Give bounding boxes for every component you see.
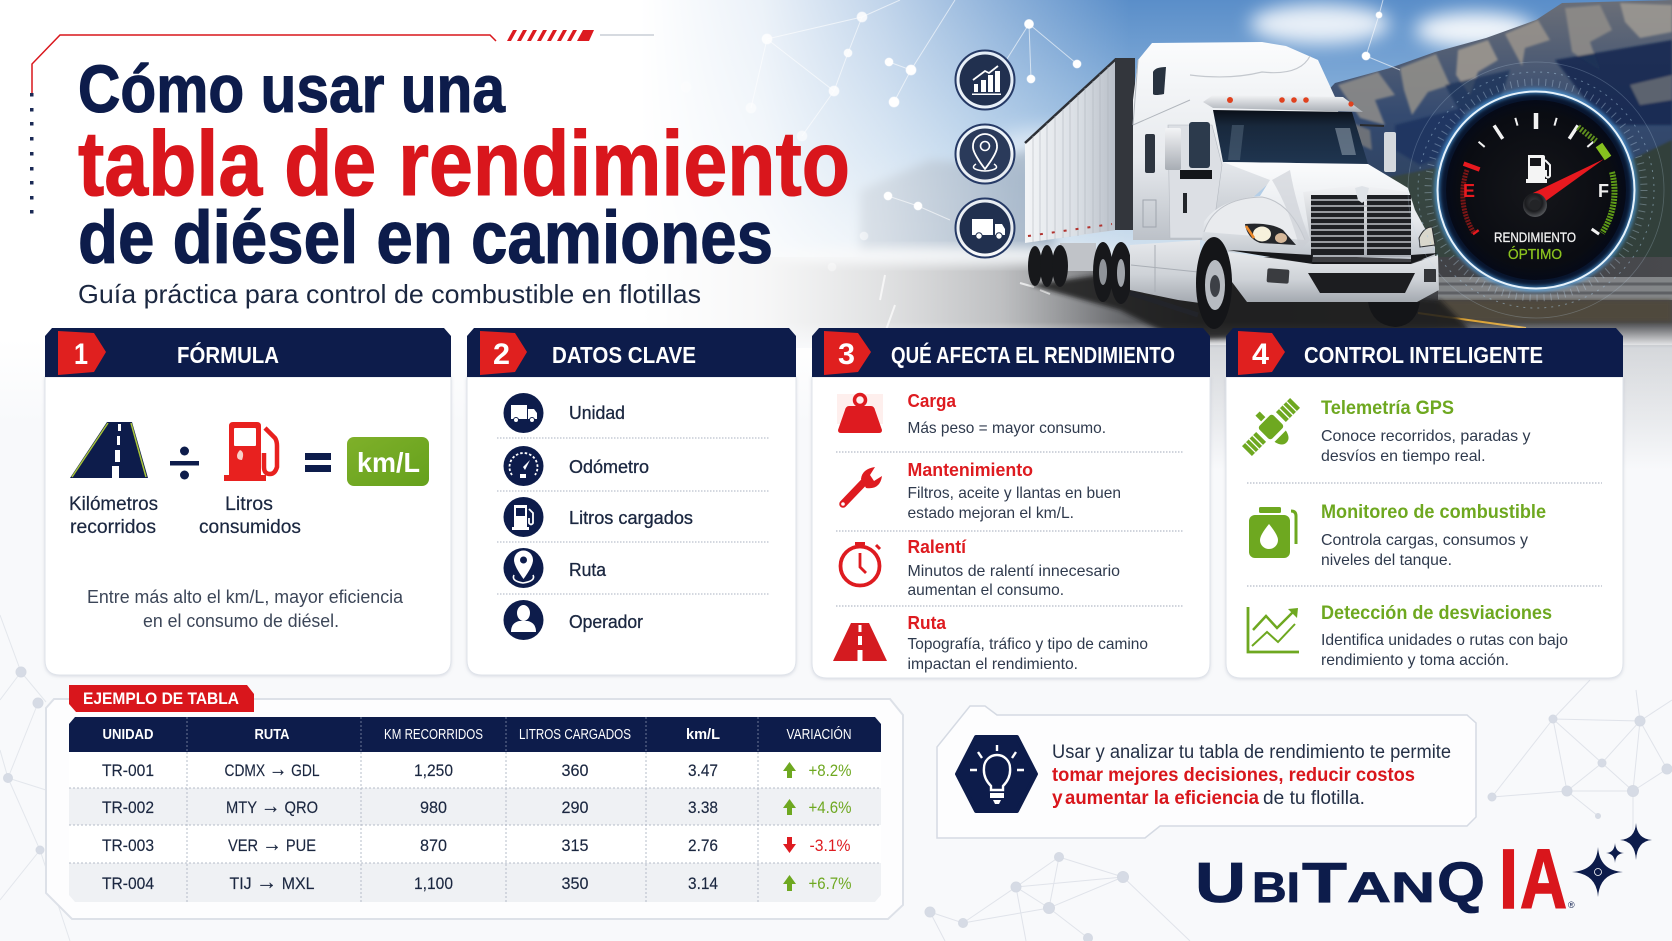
table row TR-004 (102, 869, 852, 894)
table header: VARIACIÓN (786, 726, 852, 743)
item: monitoreo de combustible: niveles del tanque. (1321, 552, 1452, 569)
panel 4 header: 4 (1252, 338, 1269, 371)
table row TR-003: 2.76 (688, 837, 718, 855)
fuel tank and steps (1130, 240, 1200, 315)
table row TR-004: 3.14 (688, 875, 718, 893)
cab sleeper and fairing (1133, 42, 1340, 240)
table header: UNIDAD (102, 726, 154, 743)
panel 4 card (1226, 377, 1623, 678)
table row TR-001: 3.47 (688, 762, 718, 780)
truck (1025, 42, 1470, 340)
logo wordmark: Q (1437, 851, 1485, 915)
rear wheels (1028, 242, 1132, 304)
sparkles (1572, 823, 1652, 897)
panel 2 header: DATOS CLAVE (552, 342, 696, 368)
table header: RUTA (254, 726, 290, 743)
formula labels (69, 494, 301, 538)
gauge E and F labels: E (1463, 181, 1475, 201)
equals symbol (305, 453, 331, 472)
item: ruta: Topografía, tráfico y tipo de camino (908, 636, 1148, 653)
logo IA: I (1499, 832, 1518, 926)
gauge E and F labels (1463, 181, 1609, 201)
row dividers (497, 438, 769, 594)
item: ruta: Ruta (908, 613, 947, 633)
item: ruta: impactan el rendimiento. (908, 656, 1078, 673)
logo wordmark: T (1302, 851, 1347, 915)
callout text: aumentar la eficiencia (1065, 788, 1259, 809)
table row TR-004: TR-004 (102, 875, 154, 893)
km/L badge: km/L (357, 447, 420, 478)
item: detección de desviaciones: Detección de desviaciones (1321, 603, 1552, 624)
table row TR-003: -3.1% (810, 837, 851, 855)
trailer (1025, 58, 1135, 271)
panel 3 card (812, 377, 1210, 678)
front wheels (1196, 237, 1420, 329)
item: detección de desviaciones: rendimiento y toma acción. (1321, 652, 1509, 669)
grille (1303, 185, 1411, 257)
cab door, window and mirror (1168, 125, 1222, 238)
table row TR-003: 315 (562, 837, 588, 855)
icon: light bulb hexagon (957, 737, 1036, 811)
table row TR-001 (102, 756, 852, 781)
table row TR-002: +4.6% (808, 799, 852, 817)
table rows (69, 752, 881, 902)
logo wordmark: U (1195, 851, 1246, 915)
gauge text: RENDIMIENTO (1494, 230, 1576, 245)
data table (69, 717, 881, 902)
table frame (46, 699, 903, 919)
formula labels: recorridos (70, 517, 156, 538)
item: ralentí (840, 537, 1120, 599)
item: monitoreo de combustible: Controla cargas, consumos y (1321, 532, 1528, 549)
logo wordmark: BI (1252, 864, 1300, 912)
tab label (69, 685, 254, 712)
title: Cómo usar una (78, 52, 506, 127)
item: odómetro: Odómetro (569, 457, 649, 477)
item: ruta: Ruta (569, 560, 607, 580)
panel 4 header (1226, 328, 1623, 377)
item: telemetría gps: Conoce recorridos, paradas y (1321, 428, 1530, 445)
formula labels: consumidos (199, 517, 301, 538)
table row TR-003: 870 (420, 837, 447, 855)
table row TR-001: 360 (562, 762, 588, 780)
panel 1: fórmula (45, 328, 451, 675)
callout text: y (1052, 788, 1063, 809)
item: detección de desviaciones (1248, 603, 1568, 669)
callout frame (937, 706, 1476, 838)
gauge needle (1523, 159, 1604, 217)
item: telemetría gps: desvíos en tiempo real. (1321, 448, 1486, 465)
formula note (87, 587, 404, 631)
item: carga: Más peso = mayor consumo. (908, 420, 1106, 437)
item: telemetría gps: Telemetría GPS (1321, 398, 1454, 419)
table row TR-002: MTY → QRO (226, 793, 318, 818)
icon: road (70, 422, 148, 478)
table row TR-003: VER → PUE (228, 831, 316, 856)
table row TR-002: 980 (420, 799, 447, 817)
headlights (1245, 224, 1435, 247)
panel 1 card (45, 377, 451, 675)
panel 1 header: FÓRMULA (177, 341, 279, 368)
table row TR-002: 3.38 (688, 799, 718, 817)
km/L badge (347, 437, 429, 486)
bumper (1228, 250, 1439, 302)
callout text: de tu flotilla. (1263, 788, 1365, 809)
item: carga (837, 391, 1106, 437)
table row TR-002 (102, 793, 852, 818)
item: mantenimiento: Filtros, aceite y llantas en buen (908, 485, 1121, 502)
item: ruta (833, 613, 1148, 673)
subtitle: Guía práctica para control de combustible en flotillas (78, 279, 701, 309)
gauge scale ticks (1464, 113, 1599, 234)
panel 3: qué afecta el rendimiento (812, 328, 1210, 678)
logo IA: A (1520, 832, 1567, 926)
table row TR-004: TIJ → MXL (230, 869, 314, 894)
callout text: tomar mejores decisiones, reducir costos (1052, 765, 1415, 786)
hood (1202, 162, 1435, 260)
formula labels: Kilómetros (69, 494, 158, 515)
table row TR-004: 1,100 (414, 875, 453, 893)
registered mark: ® (1568, 900, 1575, 910)
item: ruta (504, 548, 607, 588)
divide symbol (170, 446, 199, 480)
table header: km/L (686, 726, 720, 743)
gauge text (1494, 230, 1576, 263)
formula note: Entre más alto el km/L, mayor eficiencia (87, 587, 404, 607)
item: mantenimiento (841, 460, 1121, 522)
icon: fuel pump (224, 422, 277, 481)
table header: KM RECORRIDOS (384, 726, 483, 743)
photo background: sky, mountains and road (640, 0, 1672, 470)
item: mantenimiento: estado mejoran el km/L. (908, 505, 1074, 522)
formula labels: Litros (225, 494, 273, 515)
item: unidad: Unidad (569, 403, 625, 423)
item: litros cargados: Litros cargados (569, 508, 693, 528)
formula note: en el consumo de diésel. (143, 611, 339, 631)
table row TR-001: +8.2% (808, 762, 852, 780)
panel 4: control inteligente (1226, 328, 1623, 678)
icon: delivery truck (956, 198, 1014, 258)
item: ralentí: aumentan el consumo. (908, 582, 1064, 599)
windshield (1213, 110, 1368, 164)
item: telemetría gps (1234, 390, 1530, 467)
item: litros cargados (504, 497, 693, 537)
panel 1 header: 1 (74, 338, 88, 371)
item: monitoreo de combustible (1249, 502, 1546, 569)
table row TR-004: 350 (562, 875, 588, 893)
table header: LITROS CARGADOS (519, 726, 631, 743)
row dividers (1247, 483, 1602, 586)
title: de diésel en camiones (78, 196, 773, 279)
background network bottom (0, 615, 1672, 941)
item: carga: Carga (908, 391, 957, 411)
panel 2 header (467, 328, 796, 377)
table row TR-004: +6.7% (808, 875, 852, 893)
row dividers (836, 452, 1184, 606)
item: mantenimiento: Mantenimiento (908, 460, 1033, 480)
panel 2 header: 2 (493, 338, 510, 371)
table row TR-002: 290 (562, 799, 588, 817)
table header (69, 717, 881, 752)
header bracket decoration (30, 30, 654, 214)
table row TR-003: TR-003 (102, 837, 154, 855)
table row TR-003 (102, 831, 851, 856)
item: operador: Operador (569, 612, 643, 632)
road shadow under truck (1030, 272, 1470, 340)
item: unidad (504, 393, 625, 433)
panel 4 header: CONTROL INTELIGENTE (1304, 342, 1543, 368)
logo wordmark (1195, 851, 1485, 915)
table section: ejemplo de tabla (46, 685, 903, 919)
panel 2 card (467, 377, 796, 675)
table row TR-001: TR-001 (102, 762, 154, 780)
visor and marker lights (1203, 95, 1363, 112)
table row TR-001: 1,250 (414, 762, 453, 780)
panel 3 header: 3 (838, 338, 855, 371)
panel 3 header (812, 328, 1210, 377)
panel 1 header (45, 328, 451, 377)
right mirror (1360, 125, 1396, 172)
item: odómetro (504, 446, 649, 486)
item: detección de desviaciones: Identifica unidades o rutas con bajo (1321, 632, 1568, 649)
logo: UbiTanQ IA (1195, 823, 1652, 926)
panel 3 header: QUÉ AFECTA EL RENDIMIENTO (891, 341, 1175, 368)
item: ralentí: Minutos de ralentí innecesario (908, 563, 1120, 580)
gauge: rendimiento óptimo (1408, 62, 1664, 318)
logo wordmark: AN (1347, 864, 1435, 912)
logo IA (1499, 832, 1567, 926)
icon: location pin (956, 124, 1014, 184)
callout text (1052, 742, 1451, 809)
item: monitoreo de combustible: Monitoreo de combustible (1321, 502, 1546, 523)
item: ralentí: Ralentí (908, 537, 967, 557)
table row TR-002: TR-002 (102, 799, 154, 817)
item: operador (504, 600, 643, 640)
panel 2: datos clave (467, 328, 796, 675)
tab label: EJEMPLO DE TABLA (83, 689, 239, 708)
side icons: chart, location, truck (956, 50, 1014, 258)
table row TR-001: CDMX → GDL (224, 756, 320, 781)
callout: key takeaway (937, 706, 1476, 838)
title (78, 52, 850, 279)
gauge text: ÓPTIMO (1508, 246, 1562, 263)
gauge E and F labels: F (1598, 181, 1609, 201)
icon: performance chart (956, 50, 1014, 110)
title: tabla de rendimiento (78, 113, 850, 215)
callout text: Usar y analizar tu tabla de rendimiento te permite (1052, 742, 1451, 763)
gauge fuel pump (1526, 155, 1550, 183)
network overlay on sky (681, 0, 1400, 271)
